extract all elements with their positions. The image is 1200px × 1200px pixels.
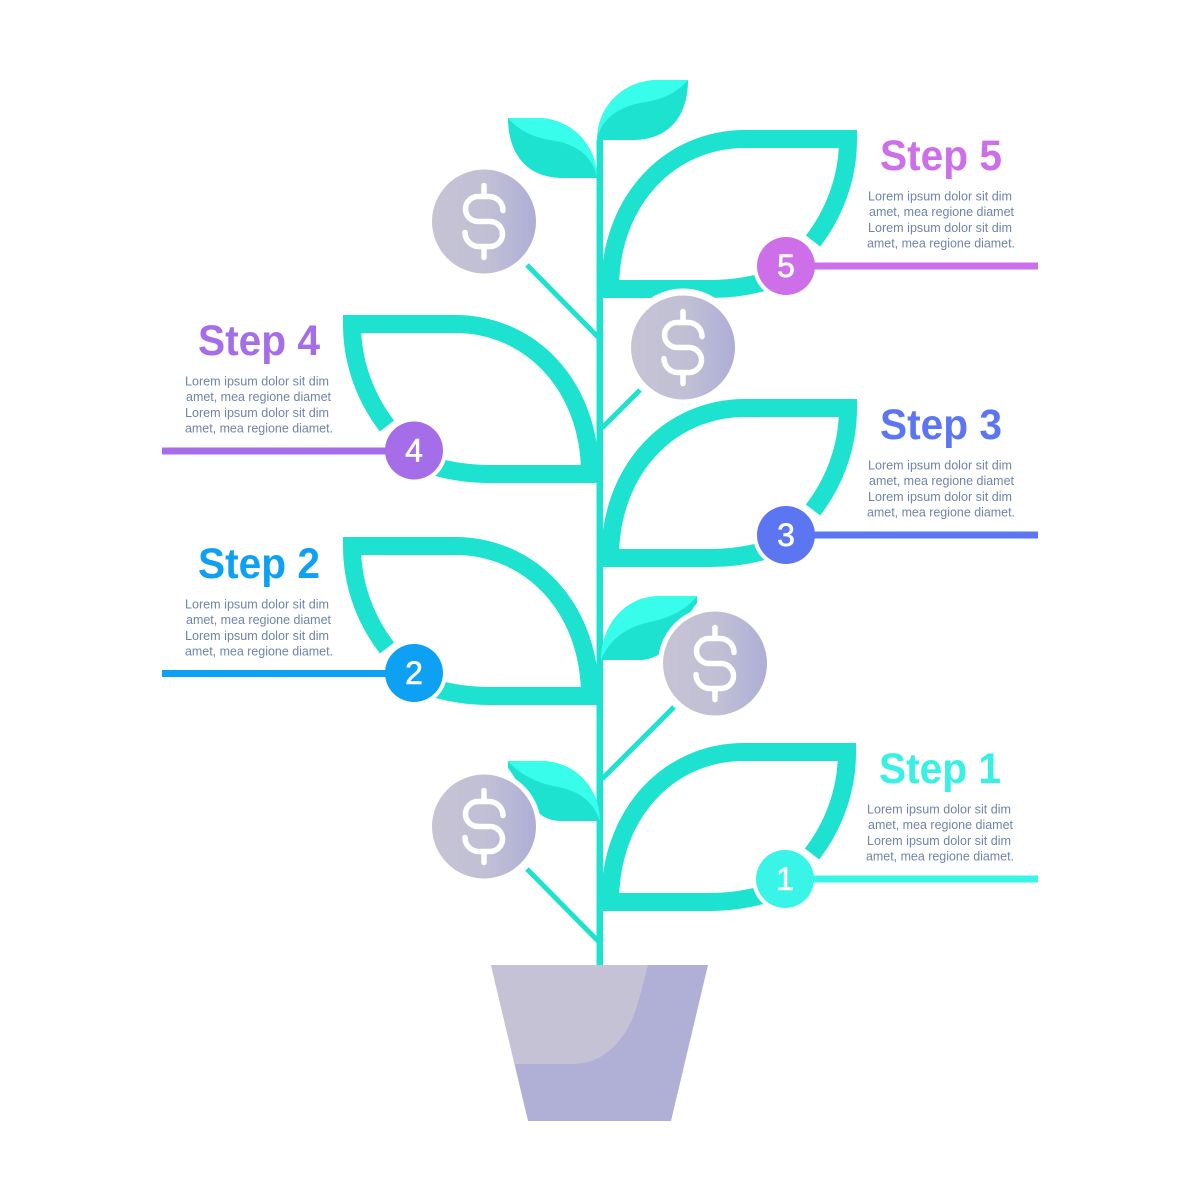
twig: lower left	[527, 869, 598, 941]
connector line: step 2	[162, 670, 387, 677]
text block: step 4	[185, 374, 333, 436]
twig: upper left	[527, 265, 598, 337]
badge: step 3	[753, 502, 819, 568]
twig: upper right	[602, 390, 640, 428]
badge: step 2	[381, 640, 447, 706]
text block: step 4: amet, mea regione diamet.	[185, 420, 333, 436]
badge: step 4: 4	[405, 432, 423, 468]
coin: lower right	[658, 606, 772, 720]
leaf outline: step 2	[352, 546, 600, 696]
text block: step 1: amet, mea regione diamet	[868, 817, 1013, 832]
connector line: step 3	[813, 532, 1038, 538]
leaf outline: step 4	[352, 324, 600, 474]
text block: step 2	[185, 596, 333, 658]
heading: step 2: Step 2	[198, 540, 320, 588]
leaf outline: step 1	[600, 752, 847, 902]
coin: upper left	[427, 164, 541, 278]
badge: step 1: 1	[776, 861, 794, 897]
connector line: step 5	[813, 262, 1038, 270]
text block: step 3: Lorem ipsum dolor sit dim	[868, 458, 1012, 472]
leaf outline: step 3	[600, 408, 848, 558]
heading: step 5: Step 5	[880, 132, 1002, 180]
badge: step 2: 2	[405, 655, 423, 691]
text block: step 2: amet, mea regione diamet	[186, 612, 331, 627]
text block: step 2: amet, mea regione diamet.	[185, 644, 333, 658]
text block: step 5: amet, mea regione diamet	[869, 204, 1014, 219]
top left sprout leaf	[508, 118, 597, 178]
leaf outline: step 5	[600, 139, 848, 289]
heading: step 1: Step 1	[879, 745, 1001, 793]
text block: step 4: amet, mea regione diamet	[186, 389, 331, 404]
text block: step 3	[867, 458, 1015, 520]
text block: step 1: Lorem ipsum dolor sit dim	[867, 833, 1011, 848]
text block: step 3: amet, mea regione diamet.	[867, 504, 1015, 520]
text block: step 1	[866, 802, 1014, 864]
text block: step 5: Lorem ipsum dolor sit dim	[868, 188, 1012, 204]
text block: step 3: amet, mea regione diamet	[869, 473, 1014, 488]
heading: step 3: Step 3	[880, 401, 1002, 449]
flower pot	[491, 965, 708, 1121]
coin: lower left	[427, 770, 541, 884]
badge: step 5	[753, 233, 819, 299]
lower left small leaf	[508, 761, 600, 821]
badge: step 4	[381, 418, 447, 484]
text block: step 5: amet, mea regione diamet.	[867, 236, 1015, 250]
badge: step 3: 3	[777, 517, 795, 553]
coin: upper right	[624, 288, 742, 406]
connector line: step 4	[162, 448, 387, 454]
text block: step 4: Lorem ipsum dolor sit dim	[185, 374, 329, 388]
badge: step 5: 5	[777, 248, 795, 284]
text block: step 1: Lorem ipsum dolor sit dim	[867, 802, 1011, 816]
top right sprout leaf	[597, 80, 688, 140]
text block: step 5: Lorem ipsum dolor sit dim	[868, 220, 1012, 235]
heading: step 4: Step 4	[198, 317, 320, 365]
plant stem	[596, 140, 603, 966]
text block: step 5	[867, 188, 1015, 250]
text block: step 1: amet, mea regione diamet.	[866, 848, 1014, 864]
badge: step 1	[752, 846, 818, 912]
text block: step 4: Lorem ipsum dolor sit dim	[185, 405, 329, 420]
connector line: step 1	[812, 876, 1038, 882]
middle right small leaf	[601, 596, 697, 660]
text block: step 3: Lorem ipsum dolor sit dim	[868, 489, 1012, 504]
twig: lower right	[602, 707, 674, 779]
text block: step 2: Lorem ipsum dolor sit dim	[185, 628, 329, 643]
text block: step 2: Lorem ipsum dolor sit dim	[185, 596, 329, 612]
